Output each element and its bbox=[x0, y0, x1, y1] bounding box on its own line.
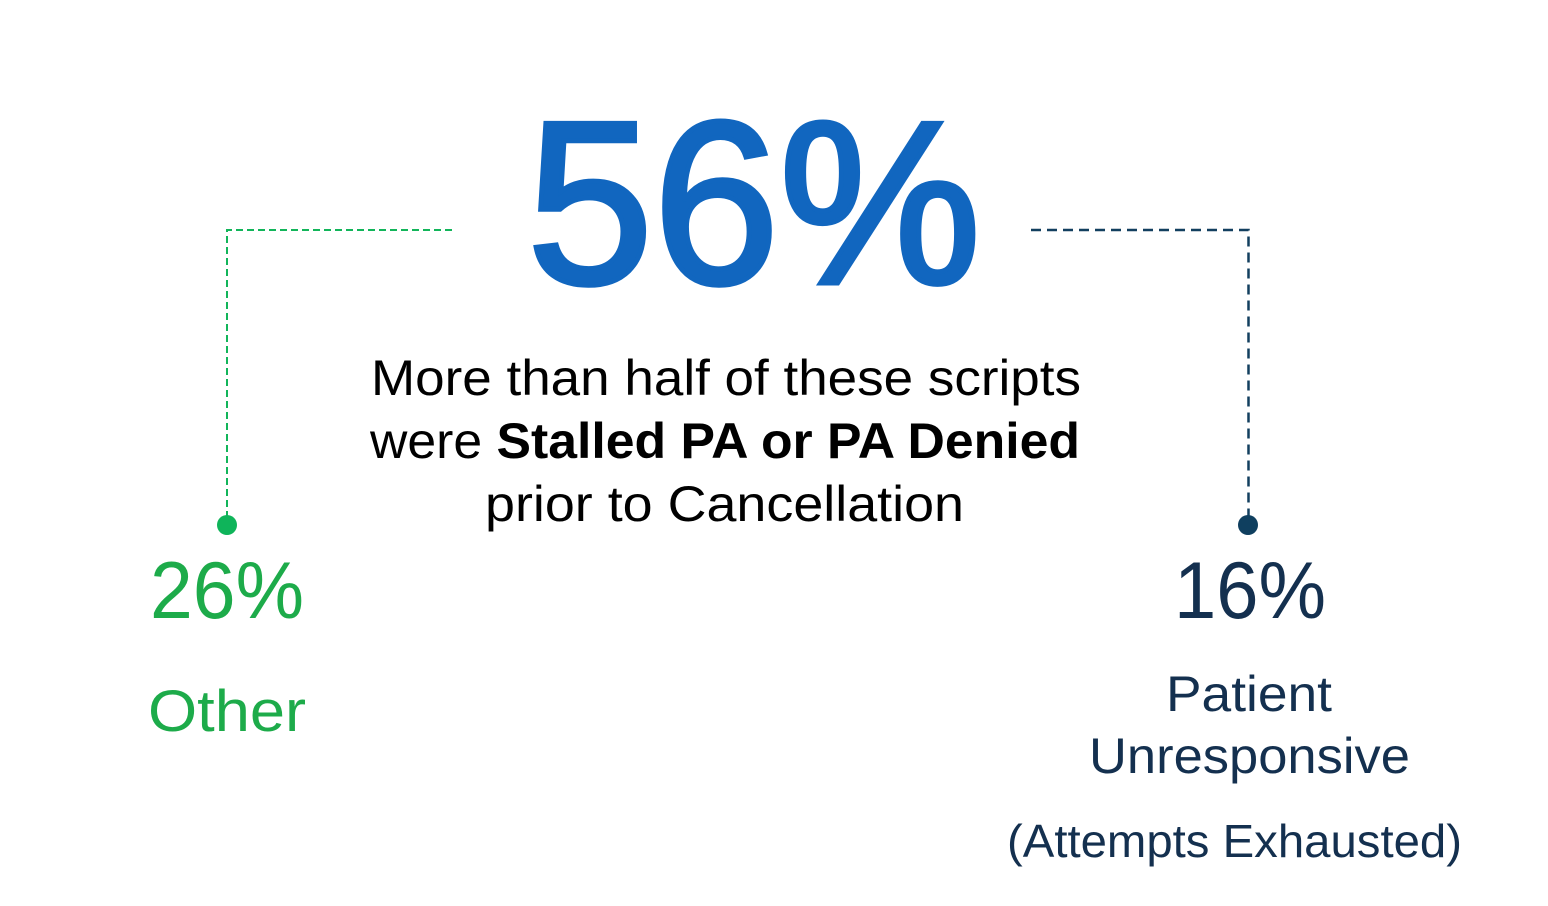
description text block bbox=[369, 350, 1081, 532]
stat: 16% Patient Unresponsive: (Attempts Exhausted) bbox=[1007, 815, 1462, 867]
headline statistic: 56%: 56% bbox=[527, 74, 981, 333]
connector: navy dashed line to Patient Unresponsive bbox=[1031, 230, 1258, 535]
description text block: were Stalled PA or PA Denied bbox=[369, 413, 1080, 469]
description text block: More than half of these scripts bbox=[371, 350, 1081, 406]
stat: 16% Patient Unresponsive: 16% bbox=[1174, 546, 1326, 636]
stat: 26% Other: Other bbox=[148, 679, 306, 744]
description text block: prior to Cancellation bbox=[485, 476, 964, 532]
stat: 16% Patient Unresponsive: Patient bbox=[1166, 666, 1332, 722]
stat: 26% Other bbox=[148, 546, 306, 744]
connector: green dashed line to Other bbox=[217, 230, 452, 535]
stat: 16% Patient Unresponsive bbox=[1007, 546, 1462, 867]
stat: 16% Patient Unresponsive: Unresponsive bbox=[1089, 728, 1410, 784]
stat: 26% Other: 26% bbox=[150, 546, 304, 636]
